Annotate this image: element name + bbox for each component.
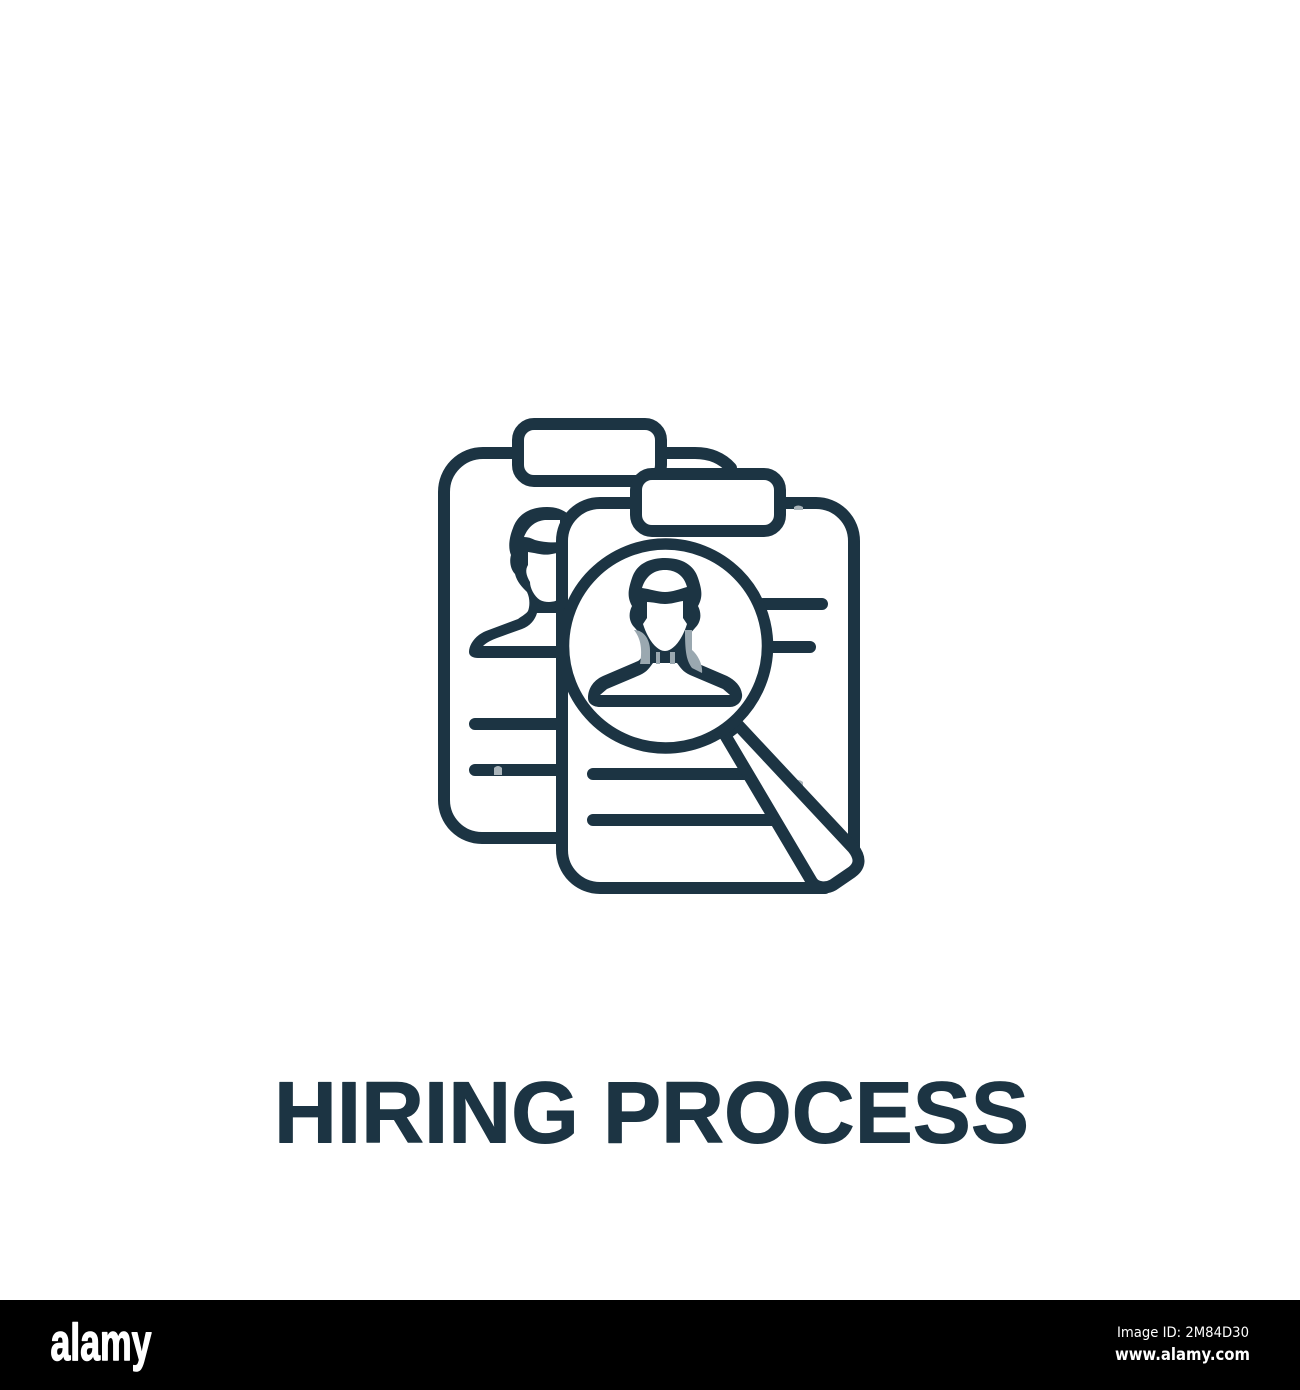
image id: Image ID: 2M84D30 <box>1117 1325 1249 1341</box>
alamy logo wordmark: alamy <box>50 1314 152 1372</box>
front clipboard text lines <box>593 604 822 820</box>
footer bar <box>0 1300 1300 1390</box>
back clipboard outline <box>444 453 731 838</box>
front candidate portrait <box>588 558 742 707</box>
back clipboard tab <box>518 424 661 481</box>
back clipboard text lines <box>475 724 560 770</box>
website: www.alamy.com <box>1115 1345 1250 1365</box>
watermark fragment on back clipboard <box>494 766 502 775</box>
back candidate portrait <box>469 507 570 658</box>
watermark fragments over neck <box>634 630 702 673</box>
icon: hiring process clipboards with magnifier <box>444 424 859 888</box>
watermark fragments on front clipboard <box>793 506 803 787</box>
magnifier lens <box>564 544 768 748</box>
front clipboard tab <box>636 474 780 531</box>
magnifier handle <box>725 725 859 887</box>
title: HIRING PROCESS <box>274 1064 1029 1162</box>
front clipboard outline <box>562 503 854 888</box>
